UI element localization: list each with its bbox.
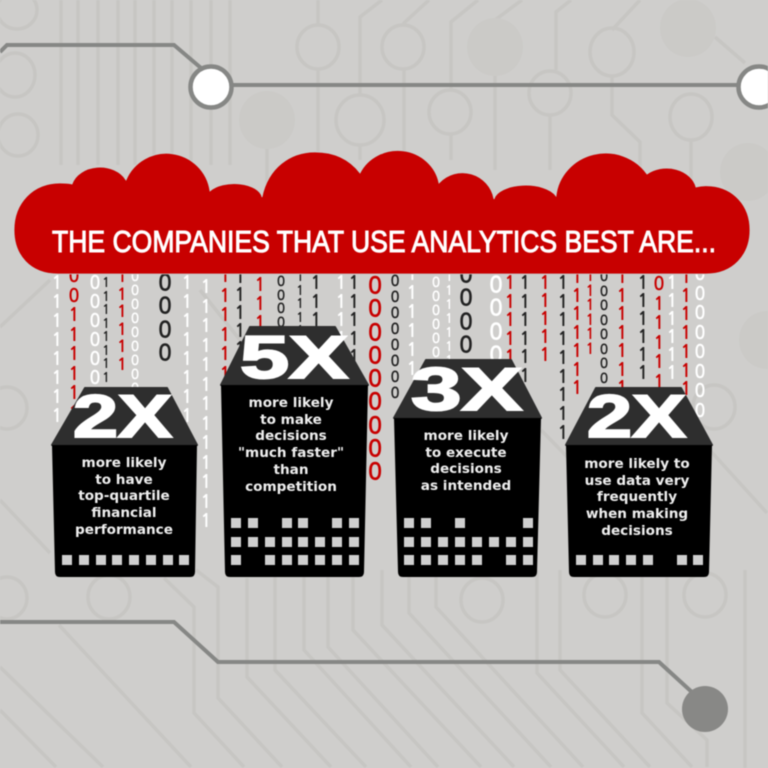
description: more likely (82, 455, 167, 471)
description: to execute (425, 445, 507, 461)
falling binary digits: 11111 (349, 274, 359, 366)
falling binary digits: 111111 (220, 267, 230, 382)
falling binary digits: 111111 (667, 274, 677, 382)
chip pins (576, 555, 703, 565)
description: more likely (424, 428, 509, 444)
red cloud banner (14, 151, 750, 274)
falling binary digits: 11111 (540, 274, 550, 364)
description: frequently (597, 489, 677, 505)
description (238, 395, 344, 495)
falling binary digits: 111111 (520, 274, 530, 384)
falling binary digits (52, 264, 705, 530)
falling binary digits: 111111 (638, 274, 648, 382)
falling binary digits: 00000000 (600, 270, 608, 386)
falling binary digits: 1111111 (681, 268, 691, 398)
description: to have (95, 472, 153, 488)
description (584, 456, 690, 539)
falling binary digits: 11111 (336, 274, 346, 366)
falling binary digits: 111111 (235, 268, 245, 376)
falling binary digits: 0000 (459, 265, 473, 357)
description: competition (245, 479, 337, 495)
chip 1: 2X financial performance (52, 383, 197, 577)
falling binary digits: 11111 (505, 274, 515, 366)
falling binary digits: 11111 (296, 270, 304, 337)
description: more likely (249, 395, 334, 411)
chip pins (62, 555, 189, 565)
falling binary digits: 111111 (407, 264, 417, 378)
description: "much faster" (238, 445, 344, 461)
description: financial (91, 505, 157, 521)
description: top-quartile (78, 488, 170, 504)
stat 2X: 2X (587, 383, 686, 450)
description: decisions (430, 461, 502, 477)
falling binary digits: 000000 (432, 276, 440, 360)
falling binary digits: 1111111 (445, 270, 453, 367)
falling binary digits: 1111 (255, 276, 265, 350)
falling binary digits: 00000000 (695, 265, 705, 420)
falling binary digits: 000000000 (131, 270, 139, 396)
falling binary digits: 1111111111111 (201, 278, 211, 530)
falling binary digits: 111111 (585, 269, 595, 356)
falling binary digits: 011111 (654, 275, 664, 390)
falling binary digits: 0000 (158, 273, 172, 365)
chip 4: 2X use data frequently (566, 383, 712, 577)
description (421, 428, 511, 494)
description: use data very (585, 473, 689, 489)
falling binary digits: 11111111 (52, 274, 62, 424)
falling binary digits: 000000 (90, 274, 100, 386)
chip 2: 5X faster decisions (221, 324, 368, 577)
description: more likely to (584, 456, 690, 472)
stat 3X: 3X (411, 356, 522, 423)
stat 5X: 5X (240, 324, 348, 391)
falling binary digits: 1111 (311, 274, 321, 348)
falling binary digits: 0000 (489, 275, 503, 367)
falling binary digits: 111111 (117, 268, 127, 372)
description: performance (75, 522, 173, 538)
chip pins (231, 518, 359, 565)
description: as intended (421, 478, 511, 494)
description: to make (260, 412, 322, 428)
description: than (273, 462, 309, 478)
falling binary digits: 111111111 (182, 274, 192, 444)
chip pins (404, 518, 533, 565)
falling binary digits: 111111111 (558, 274, 568, 442)
falling binary digits: 00000 (277, 275, 285, 343)
description (75, 455, 173, 538)
description: decisions (255, 428, 327, 444)
falling binary digits: 000000000 (368, 274, 382, 484)
falling binary digits: 1111111 (572, 268, 582, 397)
description: when making (586, 506, 688, 522)
description: decisions (601, 523, 673, 539)
falling binary digits: 00111111 (69, 267, 79, 422)
falling binary digits: 11111111 (102, 276, 110, 384)
chip 3: 3X execute decisions (394, 356, 541, 577)
falling binary digits: 00000000 (390, 274, 400, 401)
stat 2X: 2X (73, 383, 172, 450)
falling binary digits: 1111111 (617, 268, 627, 397)
